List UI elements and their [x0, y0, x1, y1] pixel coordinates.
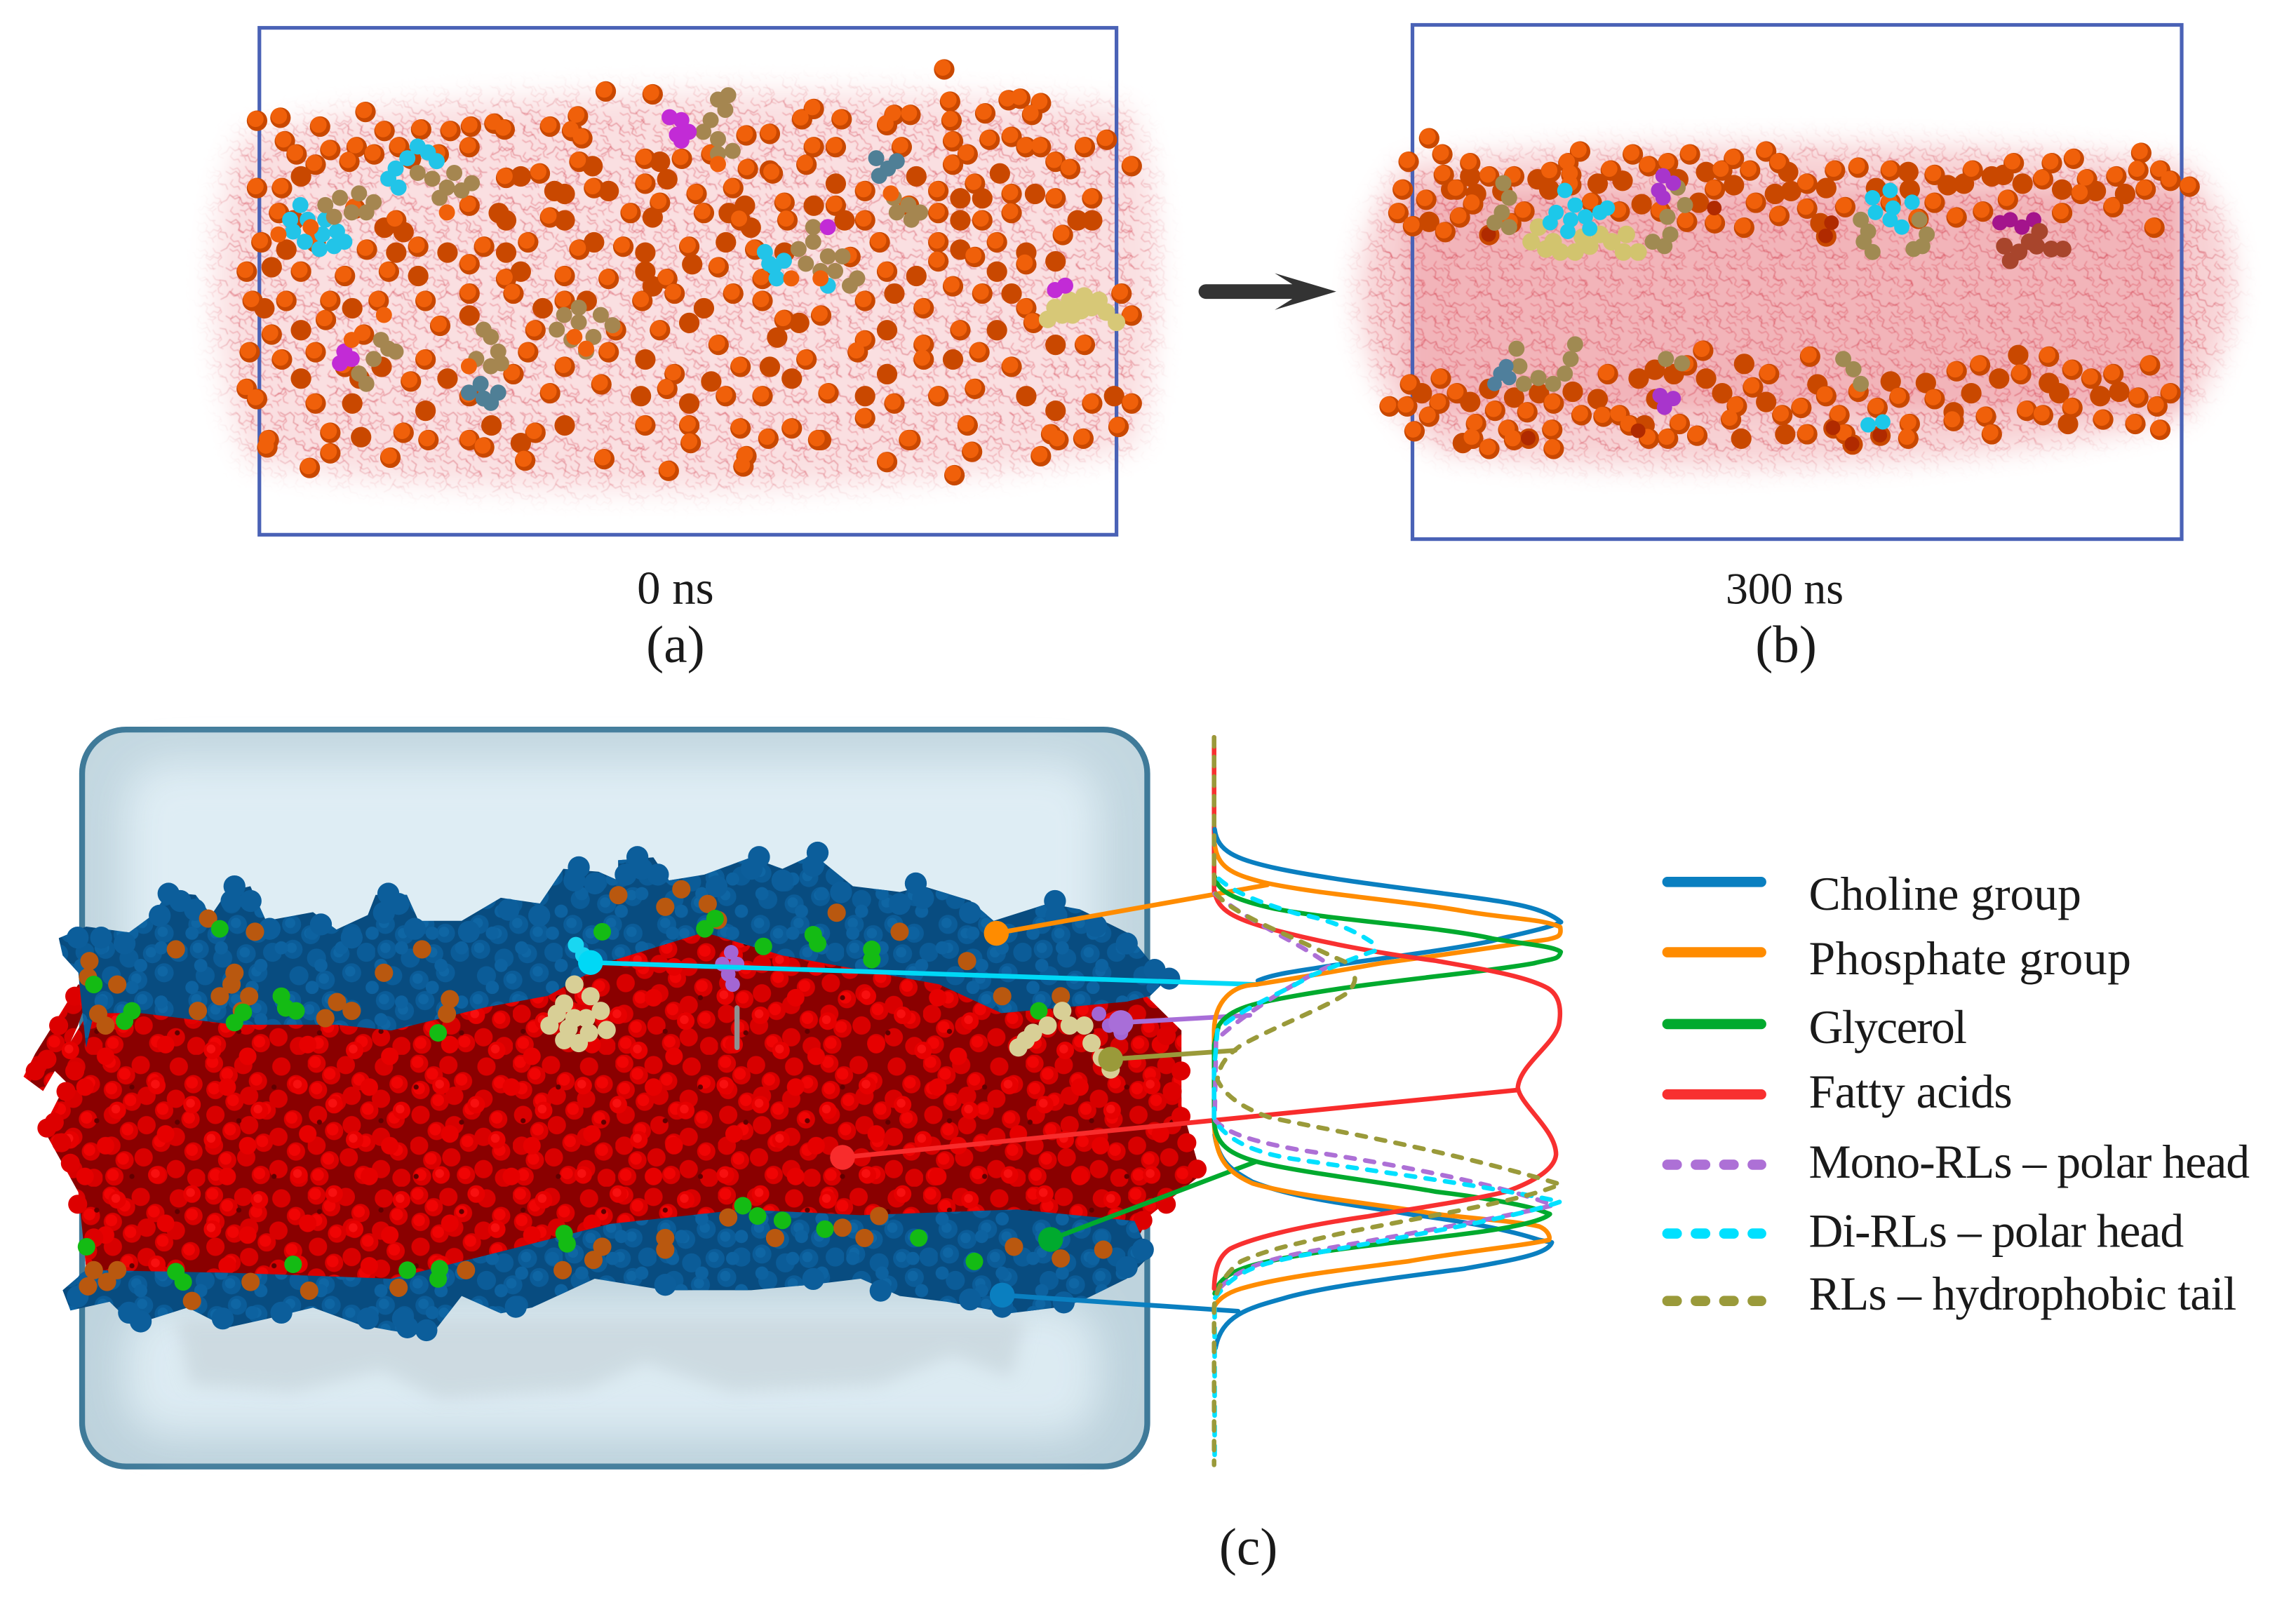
lipid tail cloud b [1343, 128, 2251, 484]
panel c: solvated bilayer box with density profile [0, 729, 1561, 1577]
rhamnolipid molecules b [1494, 176, 2063, 425]
legend: di-RLs polar head: Di-RLs – polar head [1808, 1204, 2184, 1257]
panel label (c): (c) [1219, 1519, 1277, 1577]
legend: RLs hydrophobic tail: RLs – hydrophobic tail [1808, 1268, 2236, 1320]
panel label (b): (b) [1755, 616, 1817, 674]
rhamnolipid molecules c [549, 945, 1121, 1070]
callout dots [578, 921, 1134, 1307]
panel a: 0 ns bilayer snapshot [198, 26, 1174, 673]
legend: fatty acids: Fatty acids [1808, 1065, 2013, 1118]
panel label (a): (a) [646, 616, 705, 674]
legend: phosphate group: Phosphate group [1808, 932, 2131, 985]
phosphate beads a [246, 67, 1132, 476]
panel b: 300 ns bilayer snapshot [1304, 25, 2285, 674]
legend: mono-RLs polar head: Mono-RLs – polar head [1808, 1136, 2250, 1188]
arrow from a to b [1199, 274, 1336, 310]
legend: choline group: Choline group [1808, 868, 2081, 920]
rhamnolipid molecules a [278, 95, 1117, 403]
choline layer bottom [62, 1209, 1154, 1341]
phosphate and glycerol beads [86, 889, 1103, 1301]
legend: glycerol: Glycerol [1808, 1001, 1967, 1054]
choline layer top [59, 842, 1180, 1048]
time label 0 ns: 0 ns [637, 563, 714, 614]
water box [82, 729, 1147, 1467]
time label 300 ns: 300 ns [1726, 564, 1844, 614]
phosphate beads b [1388, 137, 2189, 449]
simulation box b [1412, 25, 2182, 539]
fatty acid core [24, 934, 1207, 1279]
simulation box a [260, 28, 1117, 534]
density profile curves [1214, 737, 1561, 1465]
bead callout connectors [591, 885, 1518, 1311]
legend [1667, 868, 2250, 1320]
lipid tail cloud a [198, 74, 1174, 506]
